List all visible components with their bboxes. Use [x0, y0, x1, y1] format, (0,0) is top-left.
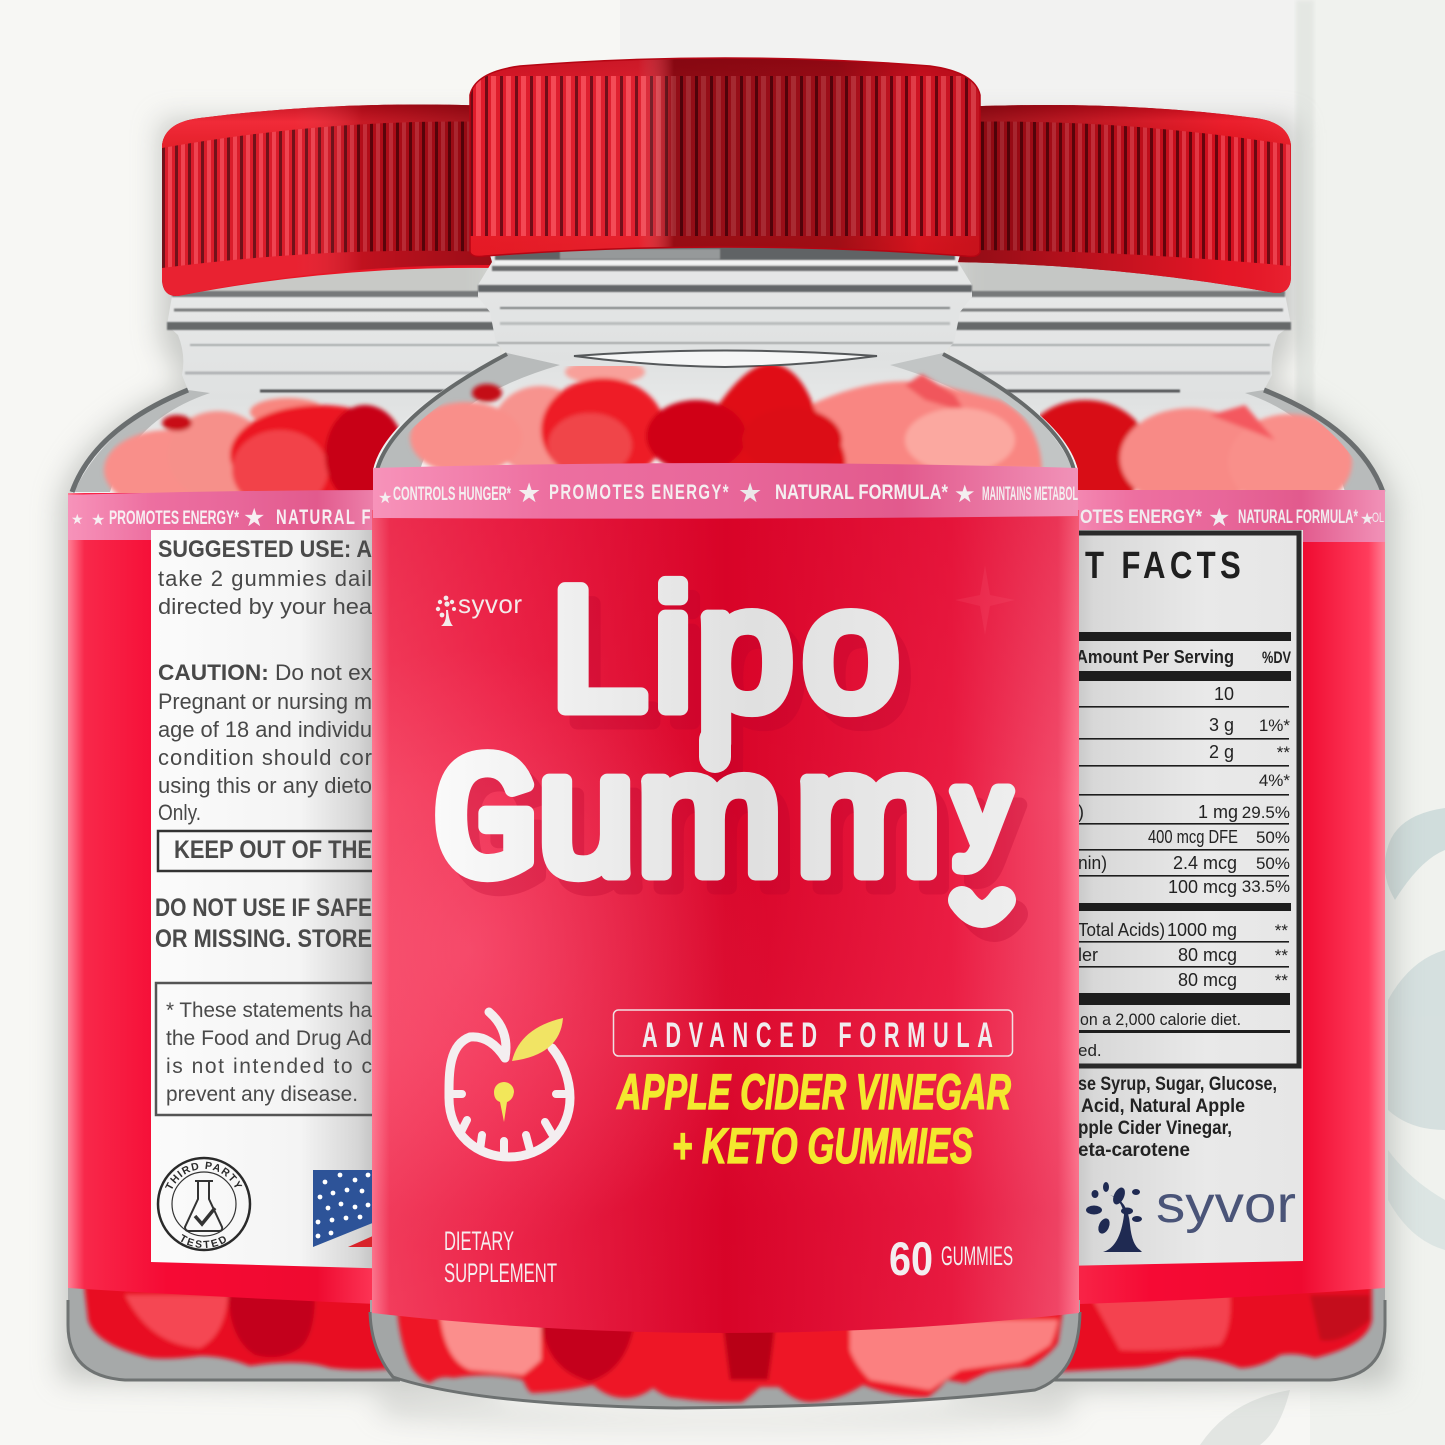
syvor logo	[1086, 1176, 1296, 1252]
facts table text: 29.5%	[1242, 803, 1290, 822]
left band text	[71, 504, 372, 532]
p descender extension	[699, 740, 731, 757]
left band text: ★	[91, 512, 105, 529]
left statement box: prevent any disease.	[166, 1083, 358, 1106]
facts table text: nin)	[1078, 853, 1107, 873]
supplement facts box	[1060, 533, 1299, 1066]
facts table text: 100 mcg	[1168, 877, 1237, 897]
title shadow: Gumm	[445, 729, 953, 940]
facts table text	[1076, 647, 1291, 1060]
right bottle gummies	[1040, 396, 1354, 490]
right band text: OTES ENERGY*	[1080, 507, 1202, 528]
right bottle cap	[955, 105, 1291, 293]
title shadow: Lipo	[563, 567, 911, 759]
decorative leaves right	[1385, 808, 1445, 1250]
right band text: OL	[1372, 509, 1384, 525]
facts table text: 1000 mg	[1167, 920, 1237, 940]
dietary supplement	[444, 1226, 557, 1288]
icon: tree	[1086, 1182, 1142, 1252]
icon: third party tested badge: THIRD PARTY	[165, 1162, 242, 1189]
center bottle gummies	[408, 366, 1044, 467]
facts table text: ler	[1078, 945, 1098, 965]
center band text: PROMOTES ENERGY*	[549, 481, 730, 504]
right band	[1050, 490, 1385, 542]
facts table text: 80 mcg	[1178, 945, 1237, 965]
center bottle glass	[373, 246, 1078, 470]
left panel directions text: Pregnant or nursing m	[158, 689, 372, 714]
text: MAINTAINS METABOL	[982, 484, 1078, 505]
ingredients text: Acid, Natural Apple	[1081, 1096, 1245, 1117]
left panel directions text: CAUTION: Do not ex	[158, 660, 372, 685]
product subtitle	[616, 1064, 1011, 1174]
front logo: syvor: syvor	[458, 589, 522, 619]
center bottle	[370, 56, 1080, 1408]
center base gummies	[370, 1300, 1080, 1408]
left statement box: the Food and Drug Ad	[166, 1027, 372, 1050]
left bottle cap	[162, 104, 495, 296]
left keep out box: KEEP OUT OF THE	[174, 836, 372, 864]
right band text	[1080, 504, 1384, 532]
heading: facts: T FACTS	[1085, 545, 1241, 587]
left band text: ★	[243, 504, 265, 532]
left panel directions text: directed by your hea	[158, 594, 373, 619]
product subtitle: APPLE CIDER VINEGAR	[616, 1064, 1011, 1120]
facts table text: **	[1275, 946, 1288, 965]
facts table text: 400 mcg DFE	[1148, 827, 1238, 847]
center band text: CONTROLS HUNGER*	[393, 484, 511, 505]
facts table text: **	[1277, 743, 1290, 762]
left bottle gummies	[102, 395, 400, 493]
icon: small tree	[436, 596, 456, 626]
left band text: PROMOTES ENERGY*	[109, 508, 239, 529]
decorative leaf bottom	[1200, 1390, 1290, 1445]
product subtitle: + KETO GUMMIES	[672, 1118, 973, 1174]
center band text: ★	[517, 478, 541, 508]
facts table text: **	[1275, 921, 1288, 940]
count: 60 gummies: 60	[889, 1232, 933, 1285]
right bottle glass	[950, 294, 1385, 500]
left panel directions text: age of 18 and individu	[158, 717, 372, 742]
facts table text: 1%*	[1259, 716, 1290, 735]
left bottle base	[68, 1280, 400, 1380]
left band	[68, 490, 400, 540]
front logo: syvor	[436, 589, 522, 626]
facts table text: ed.	[1078, 1041, 1102, 1060]
facts table text: 1 mg	[1198, 802, 1238, 822]
facts table text: Total Acids)	[1078, 920, 1165, 940]
facts table text: **	[1275, 971, 1288, 990]
facts table text: %DV	[1262, 648, 1291, 667]
count: 60 gummies: GUMMIES	[941, 1241, 1013, 1271]
center band text: ★	[738, 478, 762, 508]
title text: Lipo	[551, 553, 899, 745]
left warning text: DO NOT USE IF SAFE	[155, 894, 372, 922]
ingredients text	[1078, 1074, 1277, 1161]
left statement box	[156, 983, 396, 1115]
title shadow	[445, 567, 1020, 940]
center band	[373, 463, 1078, 519]
facts table text: 33.5%	[1242, 877, 1290, 896]
center band text: ★	[378, 490, 392, 507]
right band text: ★	[1360, 511, 1374, 528]
left band text: NATURAL F	[276, 506, 372, 529]
icon: third party tested badge: TESTED	[180, 1234, 226, 1248]
left statement box: is not intended to c	[166, 1055, 372, 1078]
left warning text	[155, 894, 372, 953]
left white panel	[151, 530, 400, 1269]
title text: y	[956, 753, 1008, 869]
left panel directions text: condition should cor	[158, 745, 372, 770]
dietary supplement: SUPPLEMENT	[444, 1258, 557, 1288]
right bottle	[950, 105, 1385, 1380]
dietary supplement: DIETARY	[444, 1226, 514, 1256]
left bottle glass	[70, 296, 500, 500]
ingredients text: eta-carotene	[1078, 1140, 1190, 1161]
left panel directions text: using this or any dieto	[158, 773, 372, 798]
left warning text: OR MISSING. STORE	[155, 925, 372, 953]
facts rules	[1060, 632, 1291, 1033]
facts table text: 50%	[1256, 854, 1290, 873]
facts table text: on a 2,000 calorie diet.	[1080, 1010, 1241, 1029]
left band text: ★	[71, 511, 84, 527]
facts table text: 80 mcg	[1178, 970, 1237, 990]
icon: apple timer	[449, 1012, 570, 1157]
center band text: ★	[954, 481, 976, 508]
left panel directions text: SUGGESTED USE: A	[158, 536, 372, 563]
left keep out box	[158, 831, 398, 871]
facts table text: 2.4 mcg	[1173, 853, 1237, 873]
facts table text: )	[1078, 802, 1084, 822]
facts table text: 10	[1214, 684, 1234, 704]
facts table text: 50%	[1256, 828, 1290, 847]
title text	[433, 553, 1008, 926]
facts table text: 3 g	[1209, 715, 1234, 735]
facts table text: Amount Per Serving	[1076, 647, 1234, 667]
left statement box: * These statements ha	[166, 999, 372, 1022]
center band text: NATURAL FORMULA*	[775, 481, 949, 504]
center band text	[378, 478, 1078, 508]
right band text: ★	[1208, 504, 1230, 532]
right band text: NATURAL FORMULA*	[1238, 507, 1358, 528]
faint sparkle	[955, 565, 1015, 635]
ingredients text: se Syrup, Sugar, Glucose,	[1078, 1074, 1277, 1095]
facts table text: 4%*	[1259, 771, 1290, 790]
title text: Gumm	[433, 715, 941, 926]
left bottle	[66, 104, 500, 1382]
icon: american flag	[313, 1170, 375, 1247]
main title: Lipo Gummy	[433, 553, 1020, 940]
syvor logo: syvor	[1156, 1176, 1296, 1234]
facts table text: 2 g	[1209, 742, 1234, 762]
right white panel	[1060, 530, 1303, 1266]
left panel directions text	[158, 536, 373, 825]
right bottle label	[1050, 490, 1385, 1305]
center label	[372, 510, 1079, 1333]
right bottle base	[1050, 1280, 1385, 1380]
smile under y	[962, 900, 1002, 914]
left bottle label	[68, 493, 400, 1305]
title shadow: y	[968, 767, 1020, 883]
icon: third party tested badge	[156, 1156, 252, 1252]
ingredients text: pple Cider Vinegar,	[1078, 1118, 1232, 1139]
advanced formula tag: ADVANCED FORMULA	[642, 1017, 993, 1055]
left panel directions text: Only.	[158, 800, 201, 825]
center bottle cap	[470, 56, 980, 261]
left panel directions text: take 2 gummies dail	[158, 566, 372, 591]
count: 60 gummies	[889, 1232, 1013, 1285]
